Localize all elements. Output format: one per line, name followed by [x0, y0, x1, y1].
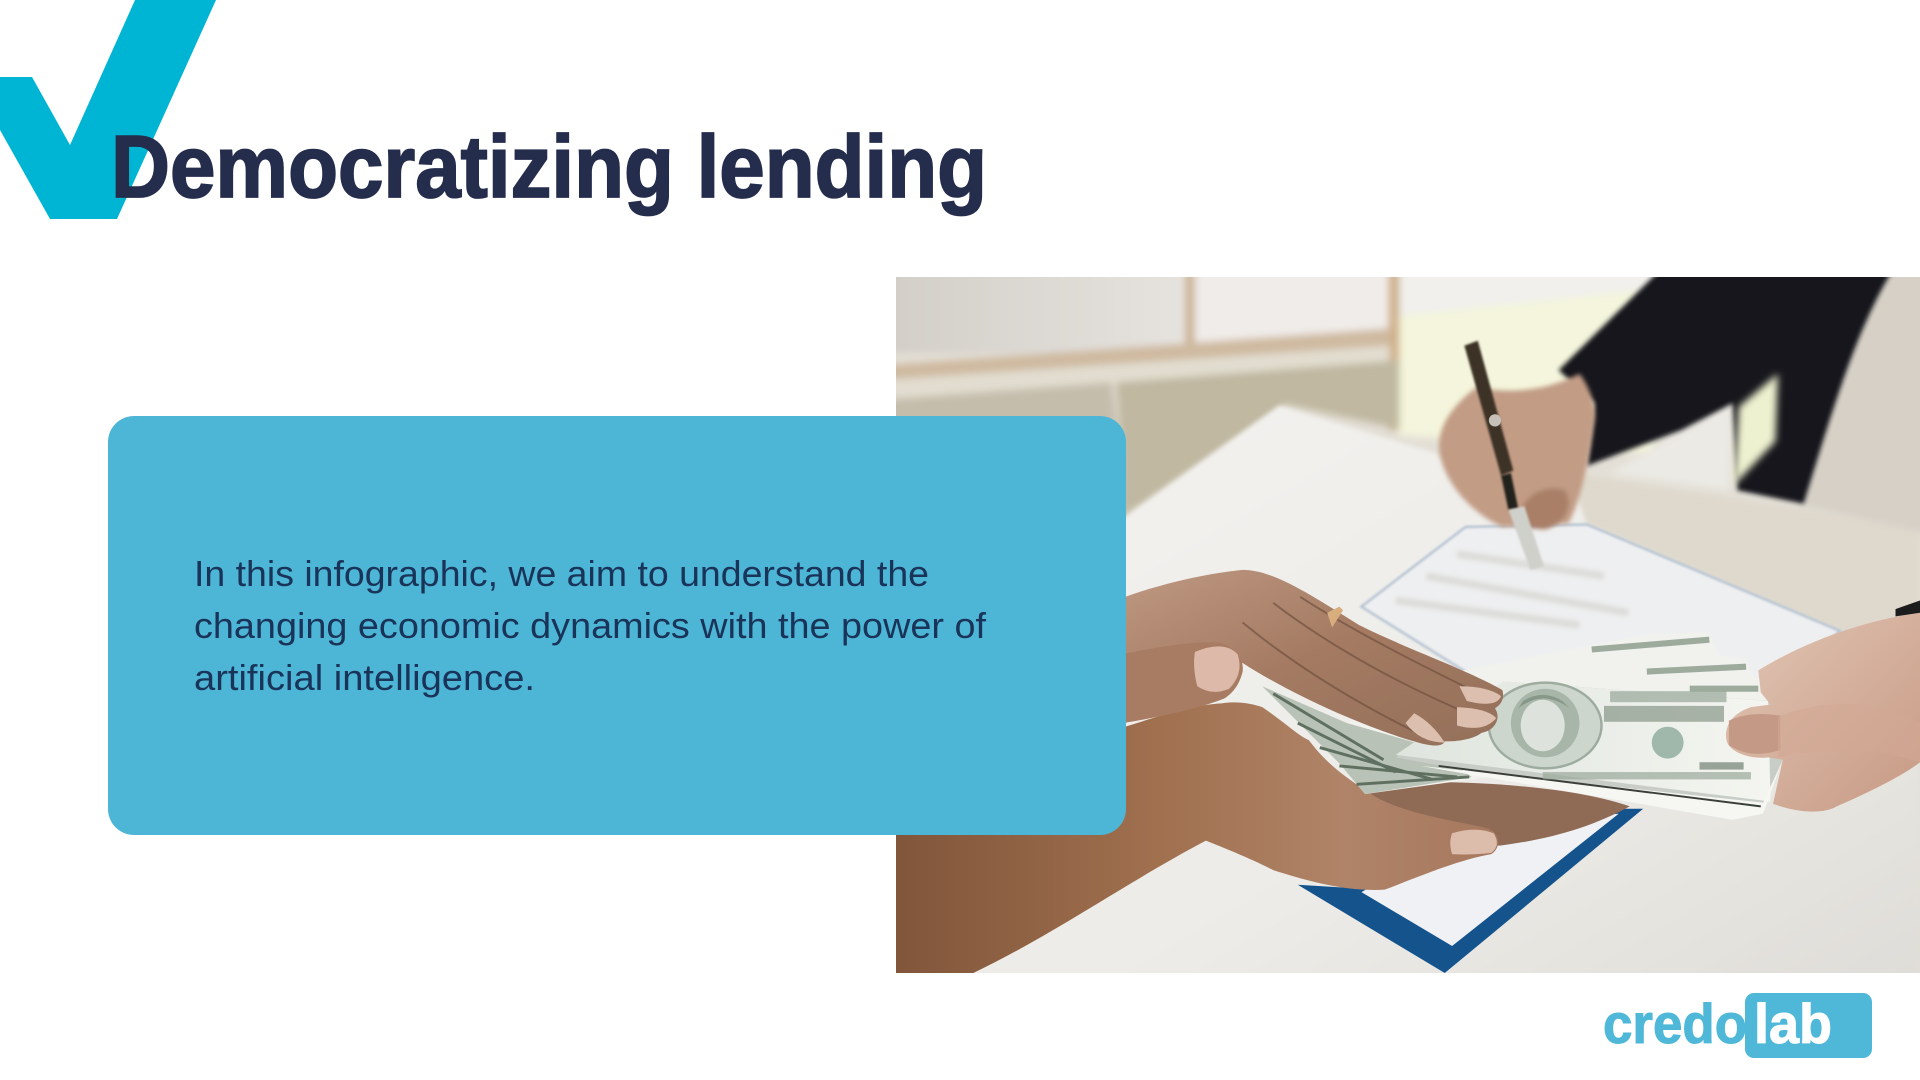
dark sleeve and jacket [1559, 270, 1920, 534]
logo: credolab [1603, 992, 1872, 1058]
logo: credolab: credo [1603, 992, 1747, 1055]
bottom blue folder [1298, 809, 1643, 973]
background room [881, 265, 1920, 973]
banknotes [1262, 632, 1783, 820]
intro paragraph: artificial intelligence. [194, 657, 535, 698]
logo: credolab: lab [1754, 992, 1832, 1055]
intro paragraph [194, 553, 987, 698]
intro paragraph: In this infographic, we aim to understand the [194, 553, 929, 594]
writing hand and pen [1439, 341, 1595, 570]
intro paragraph: changing economic dynamics with the power of [194, 605, 987, 646]
upper hand with ring [1108, 570, 1503, 746]
thumb of left hand [1108, 642, 1243, 725]
check mark icon [0, 0, 216, 219]
panel: intro text [108, 416, 1126, 835]
photo: hands exchanging banknotes over a contract [896, 277, 1920, 973]
paper contract [1361, 525, 1840, 699]
table [943, 406, 1920, 980]
lower hand and forearm [881, 702, 1630, 980]
right hand [1726, 600, 1920, 812]
